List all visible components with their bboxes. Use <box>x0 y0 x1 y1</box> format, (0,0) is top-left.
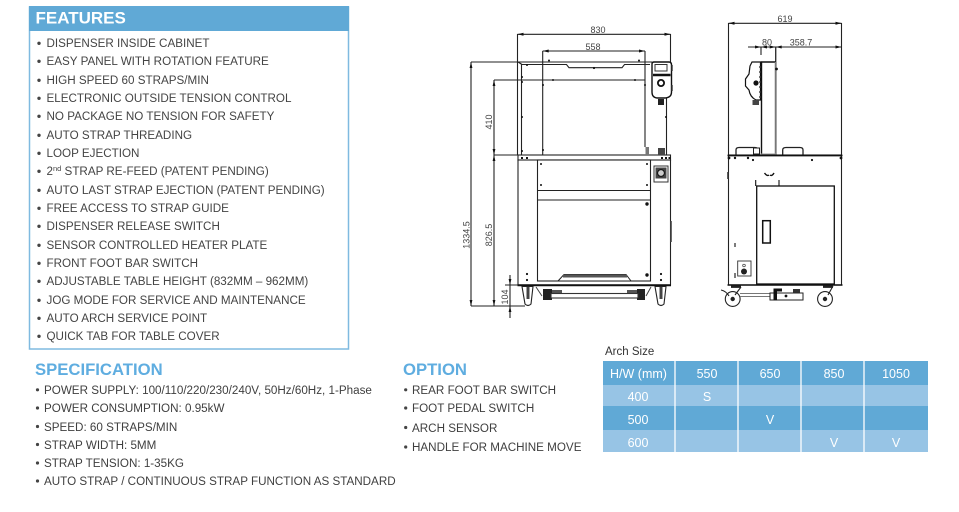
dimension lines: side view: 619 <box>777 14 793 24</box>
control panel <box>652 62 672 105</box>
table row 600 <box>628 436 901 450</box>
features list: 2 <box>46 165 53 178</box>
features list: DISPENSER RELEASE SWITCH <box>46 220 220 233</box>
table row 400: 400 <box>628 390 648 404</box>
dimension lines: front view: 830 <box>590 25 606 35</box>
table caption: Arch Size <box>605 346 654 358</box>
panel: specification <box>35 360 396 488</box>
heading: features: FEATURES <box>36 8 126 28</box>
specification list <box>36 384 396 488</box>
features list: FRONT FOOT BAR SWITCH <box>46 257 198 270</box>
specification list: SPEED: 60 STRAPS/MIN <box>44 421 177 434</box>
table row 500: 500 <box>628 413 648 427</box>
features list: STRAP RE-FEED (PATENT PENDING) <box>61 165 269 178</box>
option list <box>404 384 582 454</box>
panel: features <box>29 6 349 349</box>
table header row: 1050 <box>882 367 910 381</box>
table top <box>518 147 670 162</box>
top handles <box>736 148 803 155</box>
table row 400 <box>628 390 711 404</box>
table header row: 850 <box>824 367 844 381</box>
option list: ARCH SENSOR <box>412 422 497 435</box>
specification list: POWER CONSUMPTION: 0.95kW <box>44 402 224 415</box>
table row 500: V <box>766 413 775 427</box>
dimension lines: side view <box>728 14 842 155</box>
option list: REAR FOOT BAR SWITCH <box>412 384 556 397</box>
dimension lines: front view: 410 <box>484 114 494 130</box>
features list: AUTO LAST STRAP EJECTION (PATENT PENDING) <box>46 184 325 197</box>
features list: ELECTRONIC OUTSIDE TENSION CONTROL <box>46 92 292 105</box>
casters and foot bar <box>522 286 666 306</box>
option list: FOOT PEDAL SWITCH <box>412 402 534 415</box>
cabinet side <box>728 155 842 285</box>
dimension lines: front view: 1334.5 <box>462 221 472 249</box>
table row 600: V <box>892 436 901 450</box>
cabinet door <box>757 186 834 284</box>
table header row: H/W (mm) <box>610 367 667 381</box>
table row 600: V <box>830 436 839 450</box>
table header row: 650 <box>760 367 780 381</box>
features list: SENSOR CONTROLLED HEATER PLATE <box>46 239 268 252</box>
dimension lines: front view: 558 <box>585 42 601 52</box>
arch frame <box>518 60 667 155</box>
features list: FREE ACCESS TO STRAP GUIDE <box>46 202 229 215</box>
features list: AUTO ARCH SERVICE POINT <box>46 312 207 325</box>
specification list: POWER SUPPLY: 100/110/220/230/240V, 50Hz/60Hz, 1-Phase <box>44 384 372 397</box>
features list: DISPENSER INSIDE CABINET <box>46 37 210 50</box>
power switch <box>654 166 668 182</box>
specification list: AUTO STRAP / CONTINUOUS STRAP FUNCTION AS STANDARD <box>44 475 396 488</box>
control panel side <box>746 62 760 105</box>
cabinet <box>518 160 671 285</box>
features list: JOG MODE FOR SERVICE AND MAINTENANCE <box>46 294 306 307</box>
features list <box>37 37 325 343</box>
table header row <box>610 367 910 381</box>
features list: NO PACKAGE NO TENSION FOR SAFETY <box>46 110 275 123</box>
table row 600: 600 <box>628 436 648 450</box>
arch size table <box>603 346 928 452</box>
features list: EASY PANEL WITH ROTATION FEATURE <box>46 55 269 68</box>
panel: option <box>403 360 582 454</box>
features list: HIGH SPEED 60 STRAPS/MIN <box>46 74 209 87</box>
drawing: front view <box>462 25 672 318</box>
features list: ADJUSTABLE TABLE HEIGHT (832MM – 962MM) <box>46 275 308 288</box>
features list: AUTO STRAP THREADING <box>46 129 192 142</box>
casters and pedal <box>721 286 833 306</box>
features list: QUICK TAB FOR TABLE COVER <box>46 330 220 343</box>
table row 400: S <box>703 390 711 404</box>
features list: LOOP EJECTION <box>46 147 139 160</box>
option list: HANDLE FOR MACHINE MOVE <box>412 441 582 454</box>
specification list: STRAP TENSION: 1-35KG <box>44 457 184 470</box>
dimension lines: front view: 104 <box>500 289 510 305</box>
heading: specification: SPECIFICATION <box>35 360 163 379</box>
arch side <box>761 62 778 156</box>
heading: option: OPTION <box>403 360 467 379</box>
features list: nd <box>53 164 61 173</box>
specification list: STRAP WIDTH: 5MM <box>44 439 156 452</box>
table row 500 <box>628 413 775 427</box>
table header row: 550 <box>697 367 717 381</box>
dimension lines: front view <box>462 25 670 318</box>
dimension lines: side view: 80 <box>762 38 772 48</box>
dimension lines: front view: 826.5 <box>484 224 494 246</box>
dimension lines: side view: 358.7 <box>790 38 812 48</box>
drawing: side view <box>721 14 842 306</box>
switch box <box>738 261 751 276</box>
